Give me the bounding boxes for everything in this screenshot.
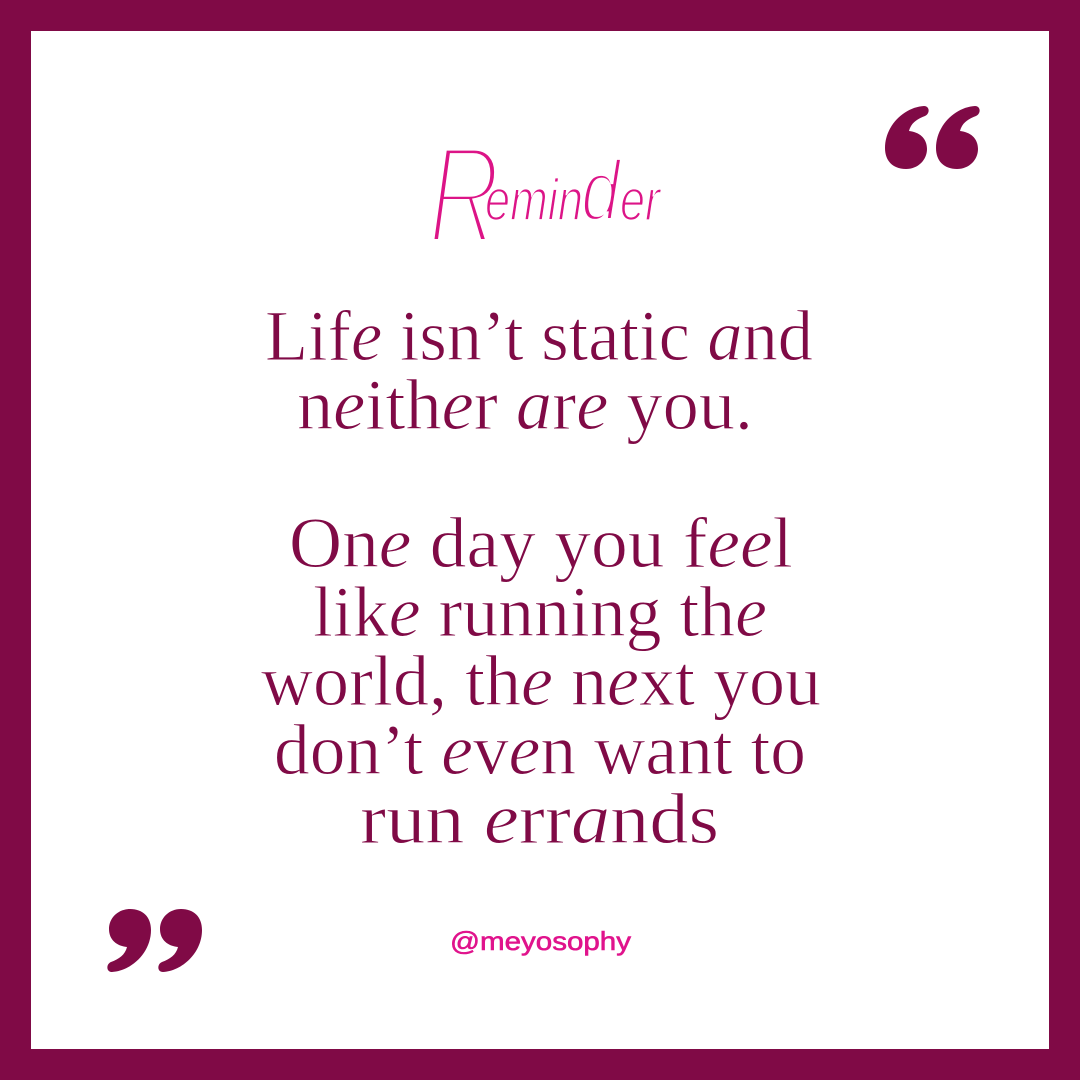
- quote text: world, the next you: [261, 641, 821, 721]
- quote text: run errands: [360, 779, 719, 859]
- heading: Reminder: R: [428, 116, 500, 273]
- heading: Reminder: d: [581, 144, 622, 239]
- quote text: Life isn’t static and: [265, 296, 813, 376]
- quote text: [261, 296, 821, 859]
- quote text: like running the: [313, 572, 767, 652]
- icon: opening quotation mark: [885, 106, 980, 169]
- heading: Reminder: [428, 116, 662, 273]
- icon: closing quotation mark: [107, 909, 202, 972]
- handle: @meyosophy: @meyosophy: [450, 926, 631, 956]
- heading: Reminder: er: [620, 168, 662, 233]
- quote text: don’t even want to: [274, 710, 806, 790]
- quote text: One day you feel: [289, 503, 793, 583]
- heading: Reminder: emin: [485, 168, 583, 233]
- quote text: neither are you.: [297, 365, 753, 445]
